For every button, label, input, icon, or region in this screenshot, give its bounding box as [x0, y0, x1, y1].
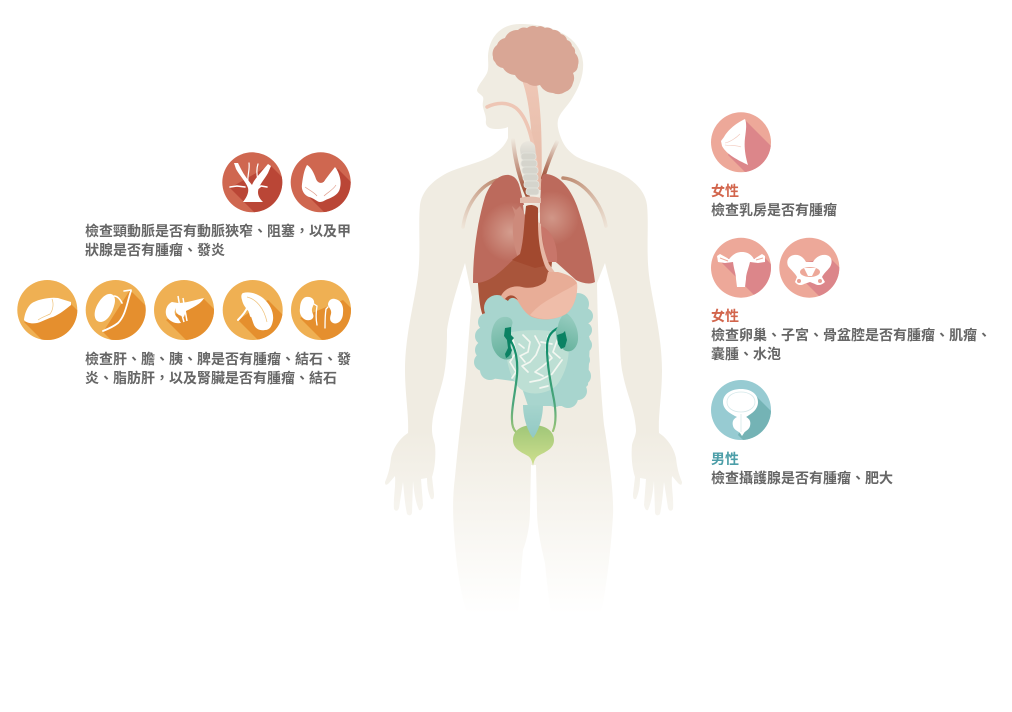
text: abdominal organs: [85, 351, 351, 386]
brain stem: [522, 78, 542, 190]
icon: uterus and ovaries: [711, 238, 771, 298]
icon: pancreas: [154, 280, 214, 340]
carotid arteries: [463, 140, 606, 227]
large intestine: [474, 293, 593, 408]
text: female pelvic: [711, 308, 991, 362]
text: female breast: [711, 183, 837, 218]
heart: [481, 191, 579, 276]
pharynx: [487, 103, 537, 170]
liver: [477, 250, 552, 318]
icon: gallbladder: [86, 280, 146, 340]
left lung: [473, 175, 528, 283]
icon: spleen: [222, 280, 283, 340]
icon: thyroid: [290, 152, 351, 212]
icon: liver: [17, 280, 78, 340]
text: female breast: 女性: [711, 183, 739, 199]
text: female pelvic: 女性: [711, 308, 739, 324]
text: female breast: 檢查乳房是否有腫瘤: [711, 202, 837, 218]
small intestine: [506, 330, 569, 393]
trachea: [520, 141, 539, 195]
icon: prostate: [711, 380, 771, 440]
ureters: [510, 328, 558, 432]
text: carotid and thyroid: 檢查頸動脈是否有動脈狹窄、阻塞，以及甲: [85, 223, 351, 239]
bladder: [513, 425, 554, 466]
text: male prostate: 檢查攝護腺是否有腫瘤、肥大: [711, 470, 893, 486]
right kidney: [556, 313, 578, 351]
icon: pelvis: [779, 238, 840, 298]
anatomy and icon artwork: [17, 24, 840, 562]
text: male prostate: [711, 451, 893, 486]
text: abdominal organs: 炎、脂肪肝，以及腎臟是否有腫瘤、結石: [85, 370, 337, 386]
icon: carotid artery: [222, 152, 282, 212]
left kidney: [491, 317, 514, 360]
icon: breast: [711, 112, 771, 172]
text: abdominal organs: 檢查肝、膽、胰、脾是否有腫瘤、結石、發: [85, 351, 351, 367]
rectum: [523, 405, 543, 438]
text: male prostate: 男性: [711, 451, 739, 467]
right lung: [540, 174, 595, 283]
human body silhouette: [385, 24, 682, 613]
stomach and duodenum: [501, 272, 577, 319]
brain: [493, 26, 579, 94]
text: carotid and thyroid: 狀腺是否有腫瘤、發炎: [85, 242, 225, 258]
icon: kidneys: [291, 280, 351, 340]
text: carotid and thyroid: [85, 223, 351, 258]
text: female pelvic: 囊腫、水泡: [711, 346, 781, 362]
text: female pelvic: 檢查卵巢、子宮、骨盆腔是否有腫瘤、肌瘤、: [711, 327, 991, 343]
